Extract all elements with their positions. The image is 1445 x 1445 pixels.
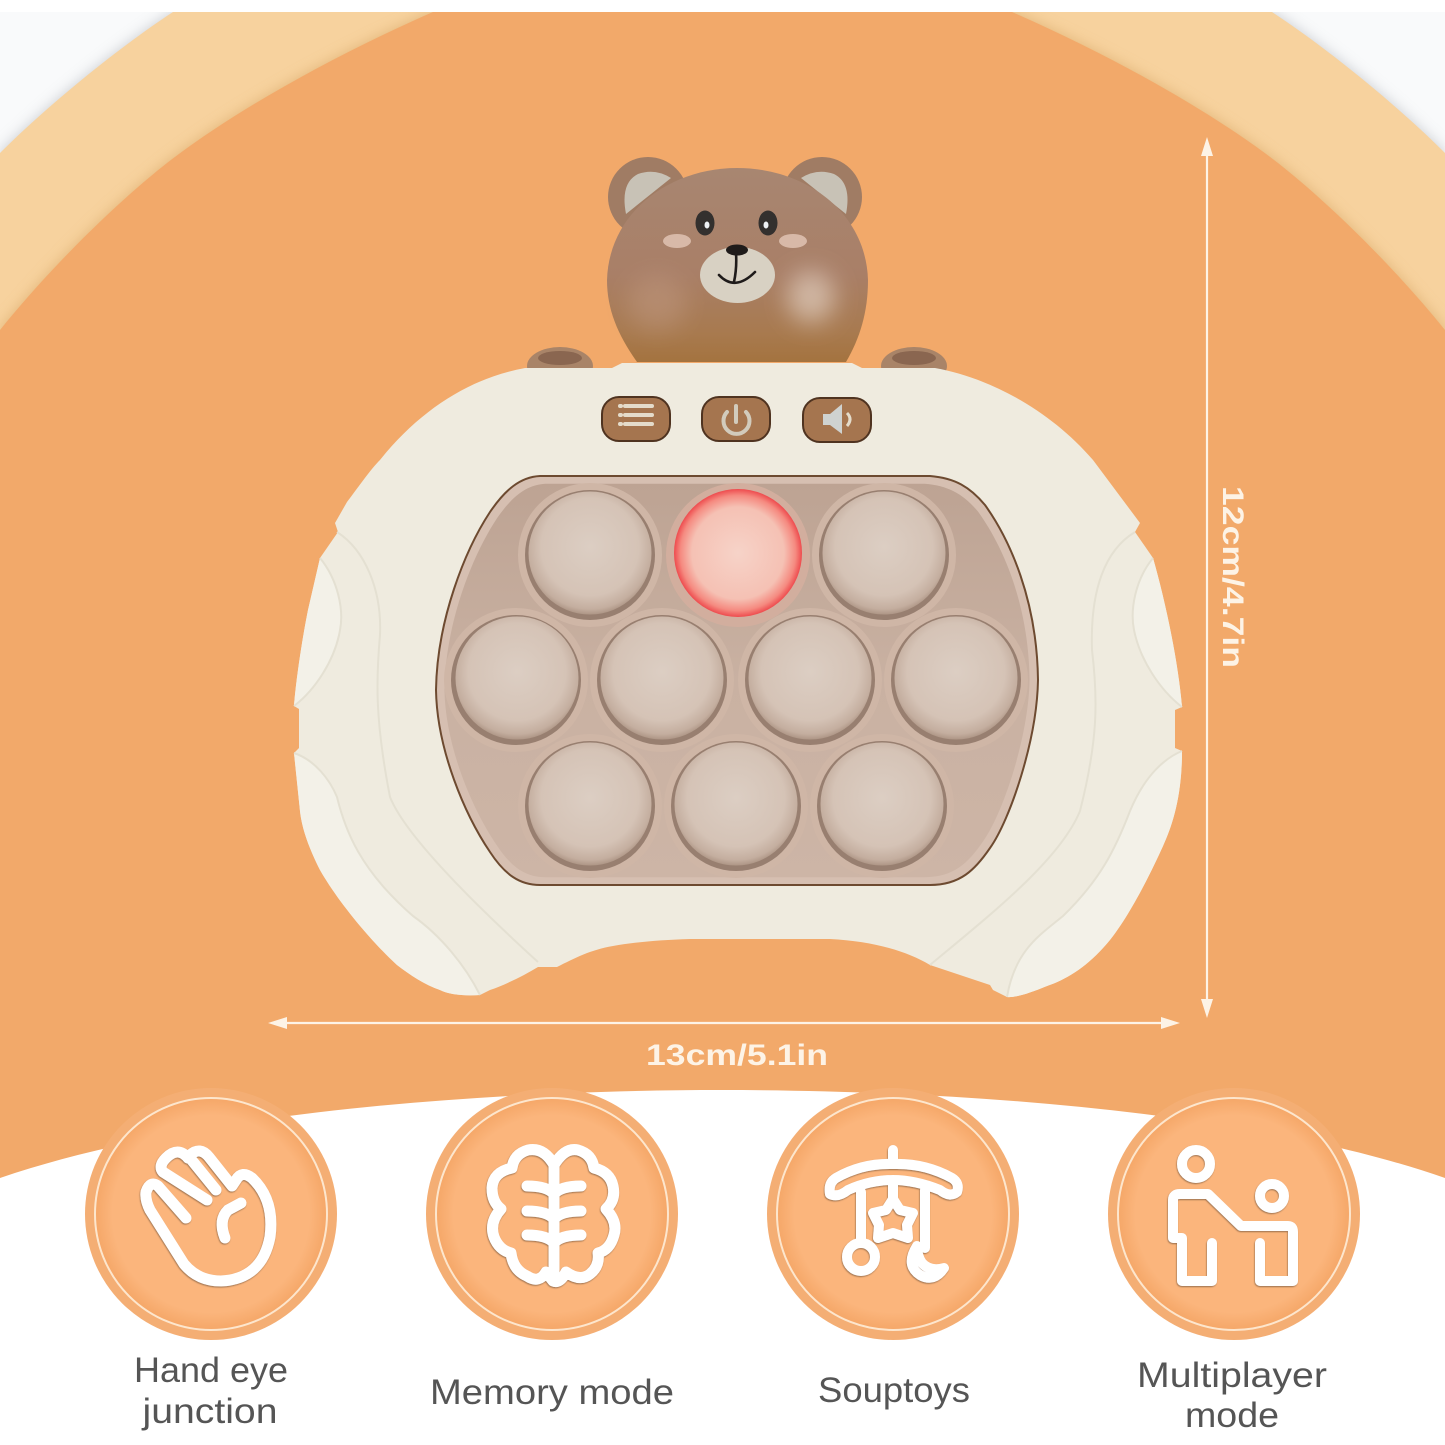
icon: brain [492, 1150, 615, 1282]
row 1 [518, 483, 956, 627]
power button [702, 397, 770, 441]
body contour lines [294, 532, 1182, 997]
feature: hand eye junction [85, 1088, 337, 1431]
product: bear pop-it game console [294, 157, 1182, 997]
icon: adult and child [1173, 1150, 1293, 1281]
badge disc [1108, 1088, 1360, 1340]
bear eyes [696, 210, 778, 236]
label [1137, 1356, 1327, 1435]
label: Souptoys [818, 1371, 970, 1410]
menu button [602, 397, 670, 441]
height dimension arrow [1201, 137, 1213, 1018]
bubble panel [436, 476, 1038, 885]
bear face ball [607, 168, 868, 362]
row 2 [444, 608, 1028, 752]
feature: multiplayer mode [1108, 1088, 1360, 1435]
label: junction [141, 1392, 278, 1431]
badge disc [85, 1088, 337, 1340]
bear nose and mouth [719, 244, 755, 283]
width dimension arrow [268, 1017, 1180, 1029]
label [134, 1351, 288, 1431]
bear head [607, 157, 868, 362]
bear ears [608, 157, 862, 237]
side bumps and grip ridges [294, 558, 1182, 997]
feature: memory mode [426, 1088, 678, 1412]
row 3 [518, 734, 954, 878]
label: Memory mode [430, 1373, 674, 1412]
function buttons [602, 397, 871, 442]
label: Multiplayer [1137, 1356, 1327, 1395]
height label: 12cm/4.7in [1216, 486, 1249, 668]
badge disc [426, 1088, 678, 1340]
controller body [294, 363, 1182, 997]
pop bubbles [444, 483, 1028, 878]
icon: hand [146, 1151, 271, 1281]
badge disc [767, 1088, 1019, 1340]
bear muzzle [700, 247, 775, 303]
top shoulder buttons [527, 347, 947, 385]
label: mode [1185, 1396, 1279, 1435]
sound button [803, 398, 871, 442]
width label: 13cm/5.1in [646, 1039, 828, 1072]
feature: souptoys [767, 1088, 1019, 1410]
icon: baby mobile [830, 1150, 958, 1278]
bear cheeks [663, 234, 807, 248]
label: Hand eye [134, 1351, 288, 1390]
